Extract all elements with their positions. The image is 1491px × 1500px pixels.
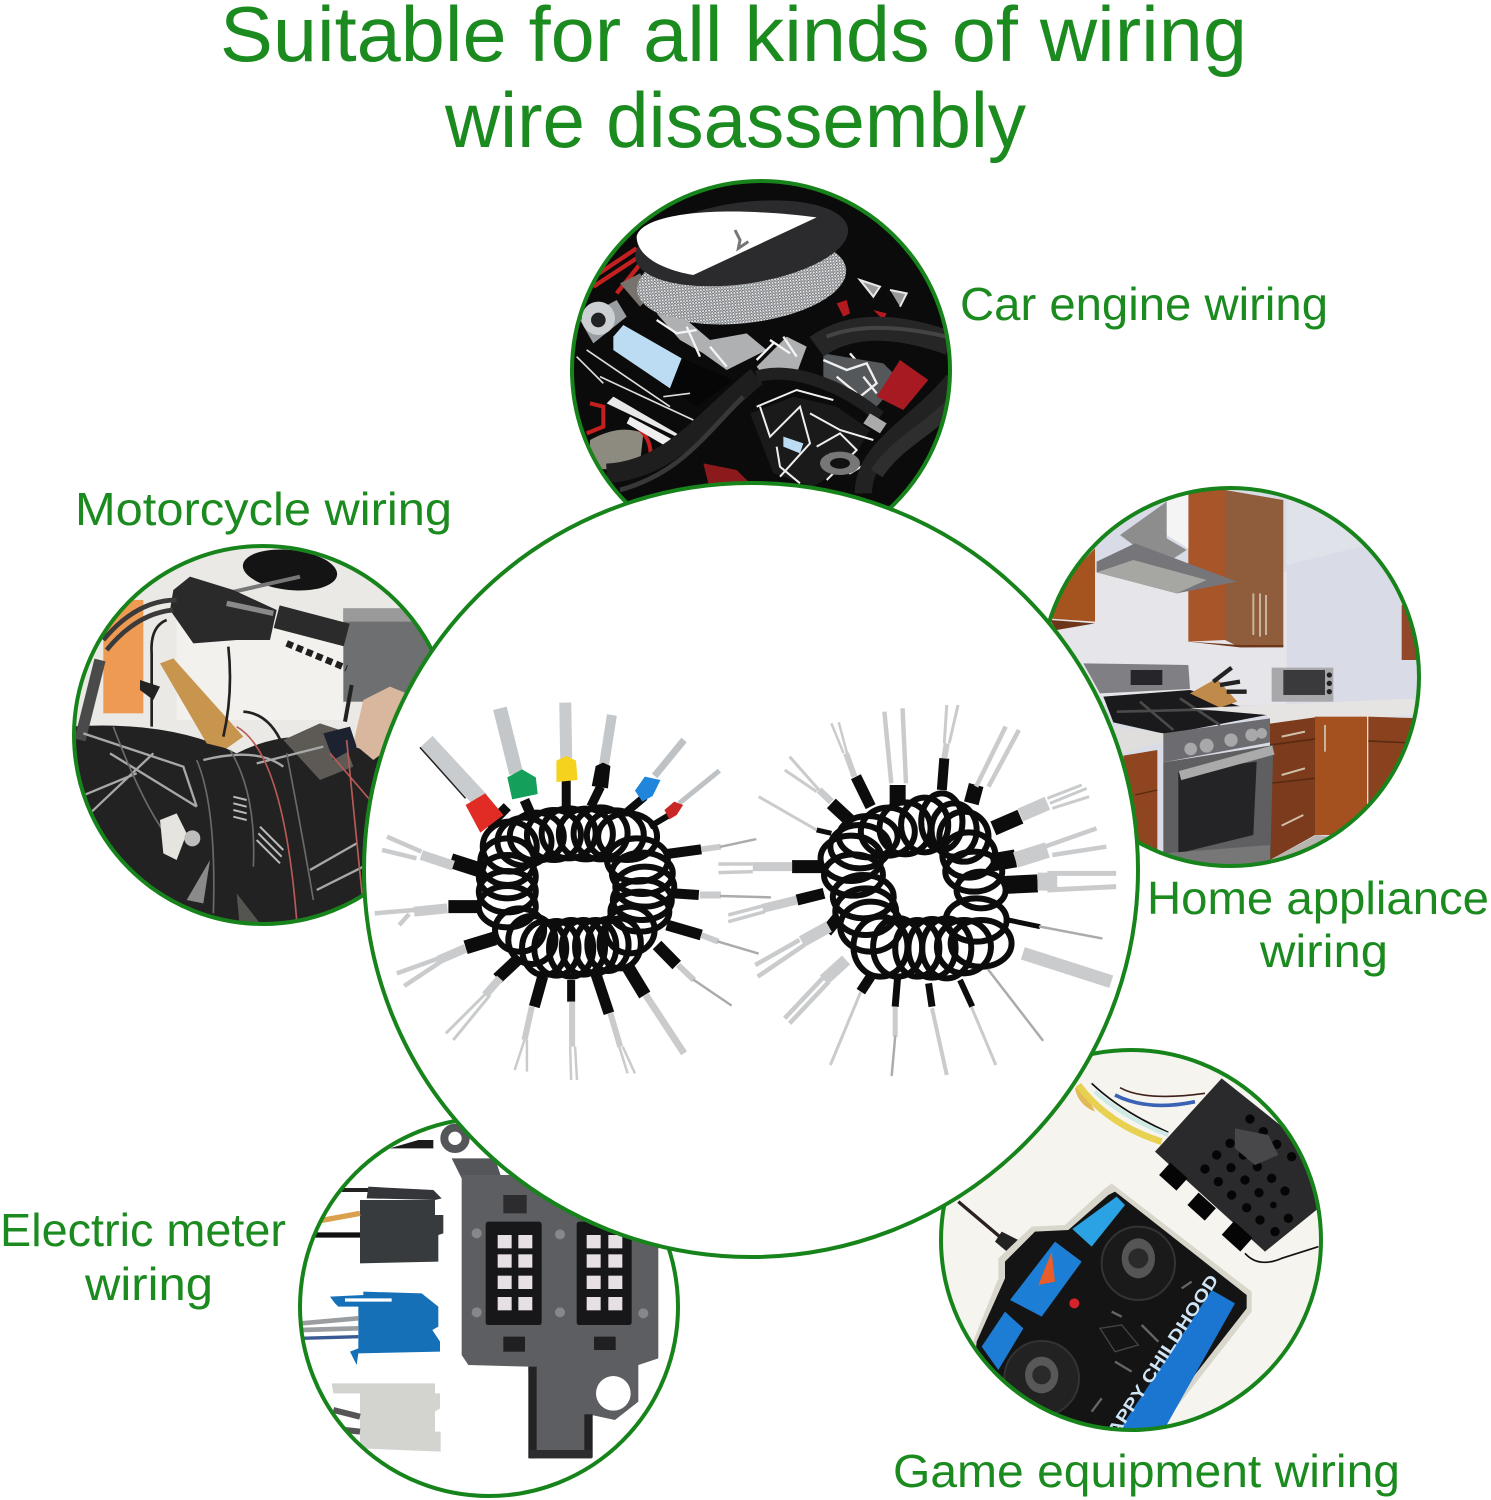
label: game equipment wiring: Game equipment wiring (893, 1445, 1400, 1497)
panel: electric meter photo (295, 1115, 685, 1500)
border: car engine (572, 181, 950, 559)
label: home appliance wiring (1147, 872, 1489, 977)
panel: game equipment photo (935, 1045, 1325, 1452)
tool set: right ring (718, 705, 1116, 1075)
left rings (479, 807, 674, 977)
panel: game equipment photo: HAPPY CHILDHOOD (1095, 1271, 1222, 1452)
title: wire disassembly (444, 76, 1026, 164)
panel: motorcycle photo (70, 540, 457, 930)
border: home appliance (1041, 488, 1419, 866)
product: terminal removal tools (375, 703, 1116, 1080)
right handles (792, 758, 1040, 1007)
title (220, 0, 1247, 164)
label: home appliance wiring: Home appliance (1147, 872, 1489, 924)
tool set: left ring (375, 703, 770, 1080)
panel: central circle (364, 483, 1138, 1257)
label: home appliance wiring: wiring (1259, 925, 1388, 977)
panel: home appliance photo (1040, 485, 1427, 872)
border: game equipment (941, 1050, 1321, 1430)
right rings (821, 793, 1012, 978)
label: motorcycle wiring: Motorcycle wiring (75, 483, 452, 535)
label: electric meter wiring (0, 1204, 286, 1310)
colored pick tubes (420, 703, 719, 833)
label: electric meter wiring: Electric meter (0, 1204, 286, 1256)
label: electric meter wiring: wiring (84, 1258, 213, 1310)
panel: car engine photo (570, 179, 952, 508)
left fork blades (375, 837, 770, 1080)
left handles (448, 780, 701, 1013)
label: car engine wiring: Car engine wiring (960, 278, 1328, 330)
right fork blades (718, 705, 1116, 1075)
border: electric meter (300, 1118, 678, 1496)
border: motorcycle (74, 546, 452, 924)
